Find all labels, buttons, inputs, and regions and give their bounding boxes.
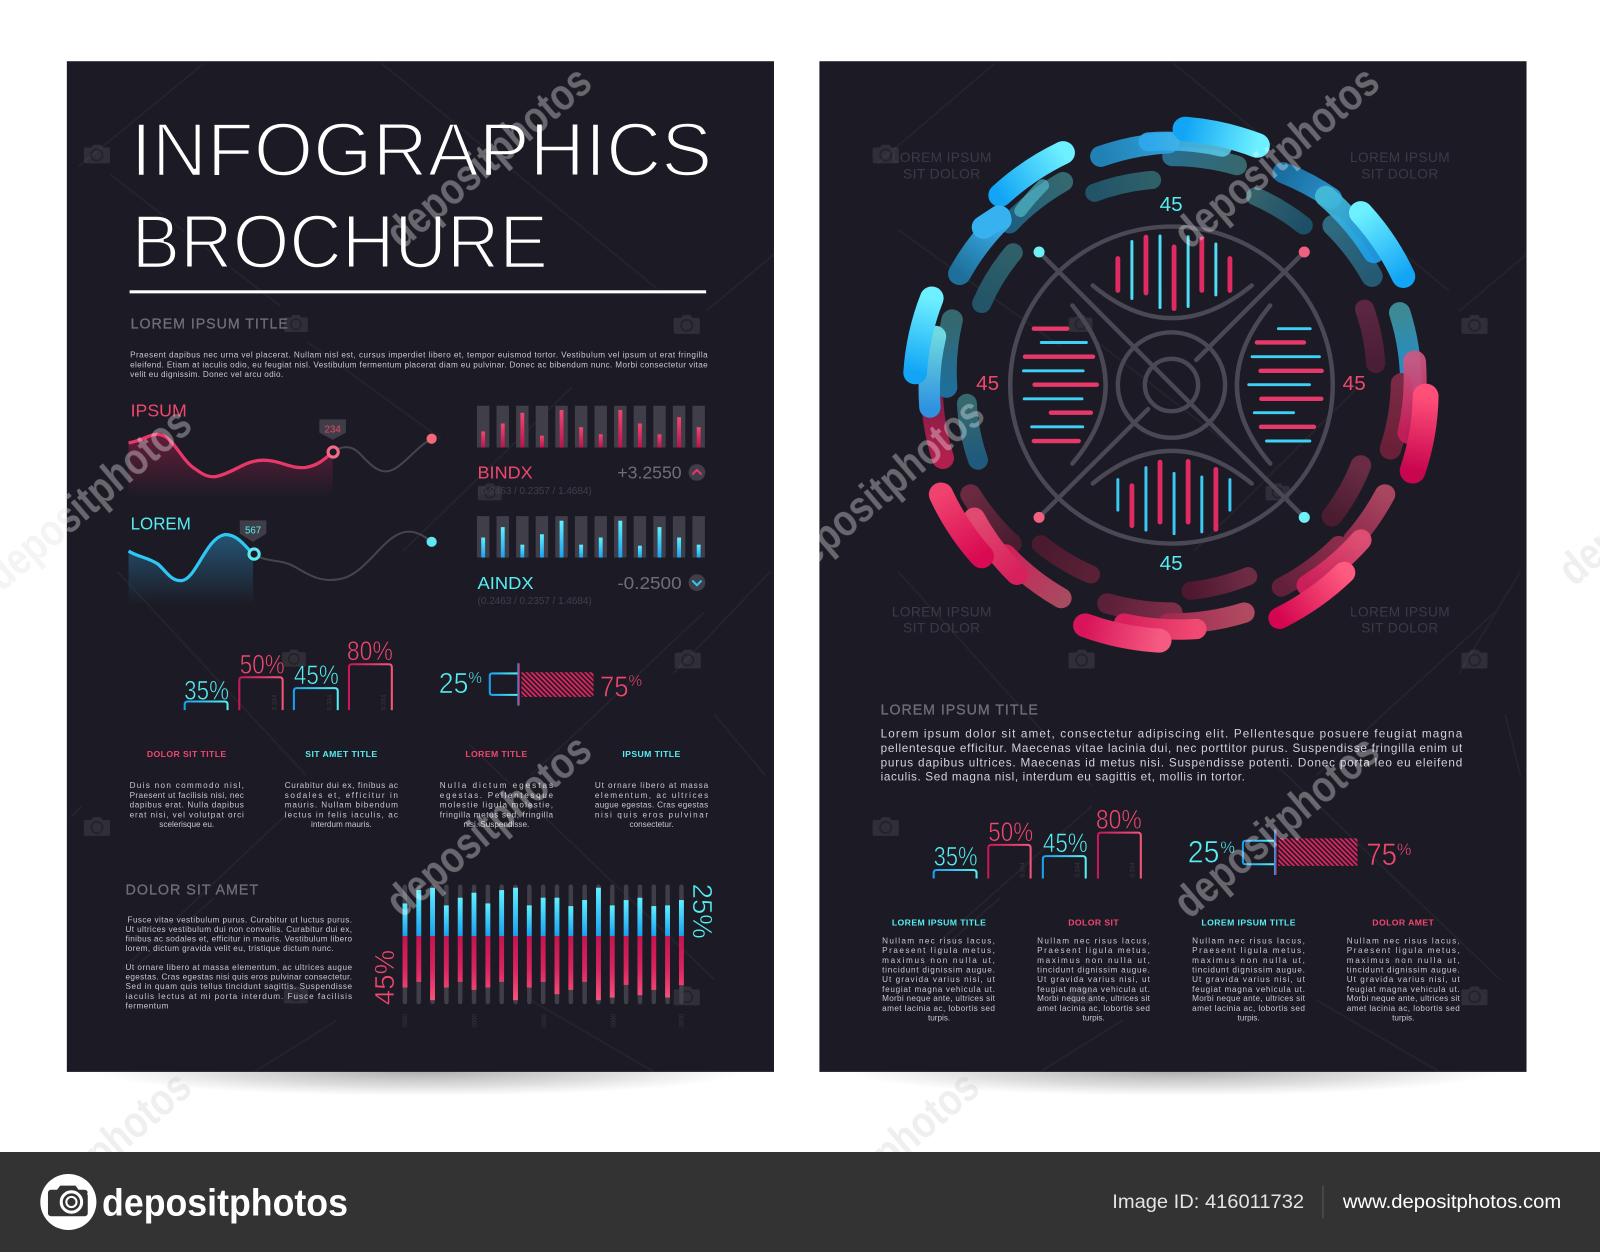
column: lorem ipsum title 2: maximus non nulla ut, xyxy=(1192,956,1305,965)
column: dolor amet: Praesent ligula metus, xyxy=(1347,946,1460,955)
line chart: ipsum: 234 xyxy=(325,425,341,436)
diverging bar chart: 45% xyxy=(369,950,400,1005)
column: lorem title: egestas. Pellentesque xyxy=(440,791,554,800)
corner labels: SIT DOLOR xyxy=(903,167,981,183)
intro paragraph: velit eu dignissim. Donec vel arcu odio. xyxy=(130,370,283,379)
column: lorem ipsum title 1: Nullam nec risus lacus, xyxy=(882,937,995,946)
watermarks over panels: depositphotos xyxy=(375,55,601,258)
column: dolor amet: tincidunt dignissim augue. xyxy=(1347,966,1460,975)
panel: right brochure page xyxy=(819,61,1527,1072)
column: lorem ipsum title 2: Praesent ligula metus, xyxy=(1192,946,1305,955)
column: ipsum title: elementum, ac ultrices xyxy=(595,791,708,800)
column: dolor amet: Nullam nec risus lacus, xyxy=(1347,937,1460,946)
stat: bindx xyxy=(478,463,705,497)
stat: bindx: BINDX xyxy=(478,463,533,483)
line chart: ipsum: IPSUM xyxy=(131,400,187,420)
intro paragraph: Praesent dapibus nec urna vel placerat. Nullam nisl est, cursus imperdiet libero et, tempor euismod tortor. Vestibulum vel ipsum ut erat fringilla xyxy=(130,351,708,360)
column: lorem ipsum title 1 xyxy=(882,917,996,1023)
column: lorem ipsum title 2: tincidunt dignissim augue. xyxy=(1192,966,1305,975)
column: lorem ipsum title 2: feugiat magna vehicula ut. xyxy=(1192,985,1305,994)
column: dolor sit title: Duis non commodo nisl, xyxy=(130,781,244,790)
paragraph: dolor sit amet: lorem, dictum gravida velit eu, tristique dictum nunc. xyxy=(126,944,334,953)
column: sit amet title: mauris. Nullam bibendum xyxy=(285,801,398,810)
corner labels: SIT DOLOR xyxy=(1361,167,1439,183)
column: ipsum title: consectetur. xyxy=(630,820,674,829)
corner labels: LOREM IPSUM xyxy=(892,604,992,620)
diverging bar chart: 0000 xyxy=(402,1013,409,1028)
percent bars: left page: 45% xyxy=(294,660,339,690)
corner labels: SIT DOLOR xyxy=(1361,621,1439,637)
diverging bar chart: 0000 xyxy=(679,1013,686,1028)
title xyxy=(131,108,712,285)
line chart: ipsum xyxy=(129,400,437,498)
column: lorem ipsum title 2: turpis. xyxy=(1238,1014,1260,1023)
percent bars: right page: 0.334 xyxy=(1019,862,1026,878)
value labels: 45 xyxy=(976,372,999,395)
column: sit amet title: Curabitur dui ex, finibus ac xyxy=(285,781,398,790)
percent bars: left page: 0.334 xyxy=(272,694,279,710)
stat: bindx: (0.2463 / 0.2357 / 1.4684) xyxy=(478,486,592,497)
line chart: lorem: 567 xyxy=(245,526,261,537)
percent bars: left page: 0.334 xyxy=(327,694,334,710)
column: dolor sit: Praesent ligula metus, xyxy=(1037,946,1150,955)
split bar: 25% / 75% right page xyxy=(1188,829,1411,875)
column: lorem ipsum title 1: feugiat magna vehicula ut. xyxy=(882,985,995,994)
column: lorem ipsum title 1: tincidunt dignissim augue. xyxy=(882,966,995,975)
percent bars: right page: 35% xyxy=(934,841,978,871)
split bar: 25% / 75% left page: 75 xyxy=(600,671,629,703)
column: dolor sit: feugiat magna vehicula ut. xyxy=(1037,985,1150,994)
split bar: 25% / 75% left page xyxy=(439,663,643,706)
watermarks over panels: depositphotos xyxy=(768,387,994,590)
column: dolor sit title: dapibus erat. Nulla dapibus xyxy=(130,801,244,810)
diverging bar chart: 0000 xyxy=(610,1013,617,1028)
percent bars: left page: 35% xyxy=(184,675,229,705)
column: dolor sit title: erat nisi, vel volutpat orci xyxy=(130,810,244,819)
footer bar xyxy=(0,1152,1600,1252)
column: sit amet title xyxy=(285,749,398,829)
column: dolor amet xyxy=(1347,917,1461,1023)
column: dolor sit: amet lacinia ac, lobortis sed xyxy=(1037,1004,1150,1013)
split bar: 25% / 75% left page: % xyxy=(468,670,482,687)
column: ipsum title: Ut ornare libero at massa xyxy=(595,781,709,790)
column: dolor sit title: scelerisque eu. xyxy=(159,820,214,829)
bar chart: aindx xyxy=(477,516,705,558)
heading: lorem ipsum title: LOREM IPSUM TITLE xyxy=(131,317,289,333)
column: lorem title: Nulla dictum egestas xyxy=(440,781,553,790)
ring: blue segments xyxy=(915,129,1403,460)
column: sit amet title: SIT AMET TITLE xyxy=(305,749,378,759)
column: dolor sit: maximus non nulla ut, xyxy=(1037,956,1150,965)
diverging bar chart: 25% xyxy=(687,884,718,939)
watermarks over panels: depositphotos xyxy=(375,723,601,926)
column: dolor amet: maximus non nulla ut, xyxy=(1347,956,1460,965)
split bar: 25% / 75% left page: 25 xyxy=(439,668,468,700)
paragraph: right page: iaculis. Sed magna nisl, interdum eu sagittis et, mollis in tortor. xyxy=(881,771,1245,784)
paragraph: dolor sit amet: fermentum xyxy=(126,1002,169,1011)
column: lorem ipsum title 2: Nullam nec risus lacus, xyxy=(1192,937,1305,946)
column: lorem title: molestie ligula molestie, xyxy=(440,801,553,810)
percent bars: left page: 80% xyxy=(347,636,393,666)
column: dolor sit title: Praesent ut facilisis nisi, nec xyxy=(130,791,244,800)
column: lorem ipsum title 2 xyxy=(1192,917,1306,1023)
percent bars: right page: 45% xyxy=(1043,828,1088,858)
title: BROCHURE xyxy=(132,200,548,285)
column: dolor amet: amet lacinia ac, lobortis sed xyxy=(1347,1004,1460,1013)
column: dolor sit: DOLOR SIT xyxy=(1068,917,1119,927)
value labels xyxy=(976,193,1366,575)
footer logo wordmark: depositphotos xyxy=(102,1181,348,1223)
diverging bar chart: 0000 xyxy=(541,1013,548,1028)
column: lorem ipsum title 2: LOREM IPSUM TITLE xyxy=(1201,917,1296,927)
column: dolor sit title: DOLOR SIT TITLE xyxy=(147,749,227,759)
bar chart: bindx xyxy=(477,406,705,448)
percent bars: left page: 50% xyxy=(240,649,285,679)
column: sit amet title: lectus in felis iaculis, ac xyxy=(285,810,398,819)
intro paragraph xyxy=(130,351,708,379)
lens bars: bottom xyxy=(1118,461,1230,534)
stat: aindx: AINDX xyxy=(478,573,534,593)
column: ipsum title: nisi quis eros pulvinar xyxy=(595,810,708,819)
paragraph: dolor sit amet: finibus ac sodales et, efficitur in mauris. Vestibulum libero xyxy=(126,935,352,944)
column: dolor sit: tincidunt dignissim augue. xyxy=(1037,966,1150,975)
column: dolor sit: turpis. xyxy=(1083,1014,1105,1023)
line art: circles and cross xyxy=(1010,227,1333,544)
paragraph: right page: pellentesque efficitur. Maecenas vitae lacinia dui, nec porttitor purus. Suspendisse fringilla enim ut xyxy=(881,742,1463,755)
column: lorem title: fringilla metus sed, fringilla xyxy=(440,810,554,819)
paragraph: dolor sit amet: Ut ultrices vestibulum dui non convallis. Curabitur dui ex, xyxy=(126,925,352,934)
column: lorem ipsum title 1: LOREM IPSUM TITLE xyxy=(892,917,986,927)
heading: dolor sit amet: DOLOR SIT AMET xyxy=(126,882,259,898)
lens bars: top xyxy=(1118,236,1230,309)
paragraph: dolor sit amet: Ut ornare libero at massa elementum, ac ultrices augue xyxy=(126,963,352,972)
column: lorem title: nisi. Suspendisse. xyxy=(464,820,529,829)
column: dolor amet: Ut gravida varius nisi, ut xyxy=(1347,975,1461,984)
split bar: 25% / 75% right page: 75 xyxy=(1366,836,1397,872)
lens bars: left xyxy=(1024,329,1097,441)
website: www.depositphotos.com xyxy=(1342,1191,1561,1213)
stat: aindx xyxy=(478,573,705,607)
image id: Image ID: 416011732 xyxy=(1112,1191,1304,1213)
value labels: 45 xyxy=(1160,193,1183,216)
split bar: 25% / 75% right page: % xyxy=(1397,841,1411,859)
stat: aindx: (0.2463 / 0.2357 / 1.4684) xyxy=(478,596,592,607)
column: lorem ipsum title 1: maximus non nulla ut, xyxy=(882,956,995,965)
column: lorem title: LOREM TITLE xyxy=(465,749,528,759)
column: lorem ipsum title 1: Praesent ligula metus, xyxy=(882,946,995,955)
column: lorem ipsum title 1: Ut gravida varius nisi, ut xyxy=(882,975,996,984)
percent bars: right page: 50% xyxy=(988,817,1033,847)
ring: pink segments xyxy=(941,309,1426,641)
footer logo icon xyxy=(40,1174,96,1230)
percent bars: right page: 80% xyxy=(1096,805,1142,835)
paragraph: right page: purus dapibus ultrices. Maecenas id metus nisi. Suspendisse potenti. Donec porta leo eu eleifend xyxy=(881,756,1462,769)
column: ipsum title xyxy=(595,749,709,829)
column: dolor amet: feugiat magna vehicula ut. xyxy=(1347,985,1460,994)
watermarks over panels: depositphotos xyxy=(1163,724,1388,928)
split bar: 25% / 75% left page: % xyxy=(629,673,643,690)
title: INFOGRAPHICS xyxy=(131,108,712,193)
column: ipsum title: IPSUM TITLE xyxy=(622,749,681,759)
value labels: 45 xyxy=(1160,552,1183,575)
split bar: 25% / 75% right page: 25 xyxy=(1188,834,1219,870)
split bar: 25% / 75% right page: % xyxy=(1220,839,1235,857)
column: dolor sit: Ut gravida varius nisi, ut xyxy=(1037,975,1151,984)
percent bars: left page: 0.334 xyxy=(381,694,388,710)
line chart: lorem xyxy=(129,514,437,604)
column: dolor sit xyxy=(1037,917,1151,1023)
column: lorem title xyxy=(440,749,554,829)
radial chart xyxy=(915,129,1426,641)
corner labels: LOREM IPSUM xyxy=(892,150,992,166)
paragraph: dolor sit amet: egestas. Cras egestas nisi quis eros pulvinar consectetur. xyxy=(126,973,352,982)
watermarks over panels: depositphotos xyxy=(1163,55,1388,258)
column: dolor amet: turpis. xyxy=(1392,1014,1414,1023)
corner labels: LOREM IPSUM xyxy=(1350,604,1450,620)
column: lorem ipsum title 2: Morbi neque ante, ultrices sit xyxy=(1192,994,1306,1003)
intro paragraph: eleifend. Etiam at iaculis odio, eu feugiat nisl. Vestibulum fermentum placerat diam eu pulvinar. Donec ac bibendum nunc. Morbi consectetur vitae xyxy=(130,360,708,369)
stat: aindx: -0.2500 xyxy=(617,573,682,593)
corner dots xyxy=(1034,247,1310,523)
percent bars: right page: 0.334 xyxy=(1075,862,1082,878)
column: ipsum title: augue egestas. Cras egestas xyxy=(595,801,708,810)
paragraph: dolor sit amet: iaculis lectus at mi porta interdum. Fusce facilisis xyxy=(126,992,352,1001)
stat: bindx: +3.2550 xyxy=(617,463,682,483)
lens bars: right xyxy=(1249,329,1322,441)
heading: right page: LOREM IPSUM TITLE xyxy=(881,702,1039,718)
column: dolor sit: Morbi neque ante, ultrices sit xyxy=(1037,994,1151,1003)
diverging bar chart: 0000 xyxy=(472,1013,479,1028)
value labels: 45 xyxy=(1343,372,1366,395)
paragraph: dolor sit amet: Sed in quam quis tellus tincidunt sagittis. Suspendisse xyxy=(126,982,352,991)
column: sit amet title: sodales et, efficitur in xyxy=(285,791,398,800)
white-margin watermarks xyxy=(0,392,1600,1252)
column: lorem ipsum title 1: Morbi neque ante, ultrices sit xyxy=(882,994,996,1003)
percent bars: right page xyxy=(934,805,1142,879)
column: dolor amet: Morbi neque ante, ultrices sit xyxy=(1347,994,1461,1003)
paragraph: dolor sit amet: Fusce vitae vestibulum purus. Curabitur ut luctus purus. xyxy=(128,916,352,925)
paragraph: right page: Lorem ipsum dolor sit amet, consectetur adipiscing elit. Pellentesque posuere feugiat magna xyxy=(881,728,1463,741)
column: dolor sit title xyxy=(130,749,244,829)
corner labels: SIT DOLOR xyxy=(903,621,981,637)
column: dolor amet: DOLOR AMET xyxy=(1372,917,1435,927)
corner labels: LOREM IPSUM xyxy=(1350,150,1450,166)
column: lorem ipsum title 1: turpis. xyxy=(928,1014,950,1023)
column: lorem ipsum title 2: amet lacinia ac, lobortis sed xyxy=(1192,1004,1305,1013)
watermarks over panels xyxy=(0,55,1388,928)
percent bars: right page: 0.334 xyxy=(1130,862,1137,878)
line chart: lorem: LOREM xyxy=(131,514,191,534)
panel: left brochure page xyxy=(67,61,774,1072)
column: dolor sit: Nullam nec risus lacus, xyxy=(1037,937,1150,946)
diverging bar chart xyxy=(369,884,718,1028)
column: lorem ipsum title 2: Ut gravida varius nisi, ut xyxy=(1192,975,1306,984)
paragraph: dolor sit amet xyxy=(126,916,352,1011)
corner labels xyxy=(892,150,1450,637)
paragraph: right page xyxy=(881,728,1463,784)
title underline xyxy=(130,290,706,293)
percent bars: left page xyxy=(184,636,393,710)
page shadows xyxy=(94,1047,1500,1096)
column: sit amet title: interdum mauris. xyxy=(311,820,372,829)
column: lorem ipsum title 1: amet lacinia ac, lobortis sed xyxy=(882,1004,995,1013)
